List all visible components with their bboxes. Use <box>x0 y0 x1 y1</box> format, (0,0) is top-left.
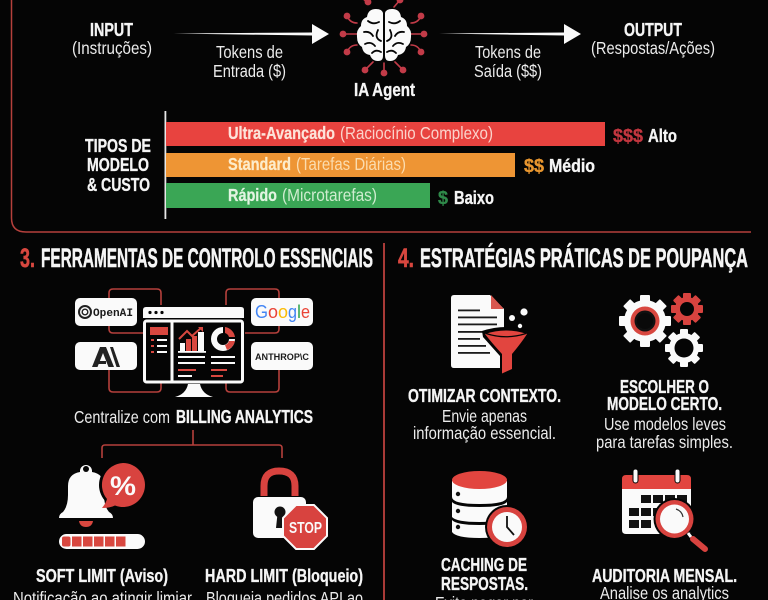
strategy 1 text: informação essencial. <box>413 423 556 443</box>
panel: control tools <box>13 243 373 600</box>
icon: analytics monitor <box>143 307 244 397</box>
bar chart: model cost tiers <box>164 111 677 219</box>
strategy 2 text: para tarefas simples. <box>596 432 733 452</box>
bar: standard: $$ <box>524 155 545 176</box>
strategy 1 text <box>408 385 561 443</box>
logo: Anthropic wordmark: ANTHROP\C <box>255 352 309 363</box>
connector lines: limits tree <box>102 430 282 458</box>
icon: hard limit padlock <box>253 471 327 549</box>
hard limit title: HARD LIMIT (Bloqueio) <box>205 565 363 586</box>
logo: Google: o <box>278 301 288 322</box>
output label <box>591 19 715 58</box>
bar: standard: Standard <box>228 154 291 174</box>
strategy 1 text: OTIMIZAR CONTEXTO. <box>408 385 561 406</box>
icon: hard limit padlock: STOP <box>289 520 322 537</box>
icon: gears <box>619 293 703 367</box>
connector lines: providers to dashboard <box>109 289 279 392</box>
bar: ultra advanced: $$$ <box>613 125 644 146</box>
input tokens label <box>213 42 286 81</box>
strategy 4 text <box>592 565 737 600</box>
bar: standard: Médio <box>549 155 595 176</box>
model types heading: TIPOS DE <box>85 135 151 156</box>
icon: database and clock <box>452 471 529 549</box>
heading: section 3: 3. <box>20 243 35 273</box>
divider between sections <box>383 243 385 600</box>
strategy 3 text: RESPOSTAS. <box>441 573 528 594</box>
icon: soft limit bell: % <box>110 471 136 501</box>
panel: savings strategies <box>398 242 748 600</box>
icon: brain with nodes <box>340 0 427 76</box>
bar: ultra advanced: Ultra-Avançado <box>228 123 335 143</box>
input tokens label: Tokens de <box>216 42 283 62</box>
bar: ultra advanced <box>166 122 677 146</box>
logo: Google: G <box>255 301 268 322</box>
model types heading: & CUSTO <box>87 174 150 195</box>
output tokens label: Tokens de <box>475 42 541 62</box>
bar: standard <box>166 153 595 177</box>
logo: Google <box>251 298 313 326</box>
panel: token flow and model costs frame <box>12 0 751 232</box>
input tokens label: Entrada ($) <box>213 61 286 81</box>
logo: Google: o <box>268 301 278 322</box>
strategy 1 text: Envie apenas <box>442 406 527 426</box>
caption: billing analytics: Centralize com <box>74 407 170 427</box>
heading: section 3 <box>20 243 373 273</box>
input label <box>72 19 152 58</box>
logo: Google: e <box>301 301 310 322</box>
bar: ultra advanced: Alto <box>648 125 677 146</box>
input label: INPUT <box>90 19 134 40</box>
logo: Google: l <box>297 301 301 322</box>
model types heading <box>85 135 151 195</box>
strategy 3 text <box>435 554 533 600</box>
model types heading: MODELO <box>87 154 149 175</box>
bar: fast <box>166 183 494 208</box>
strategy 2 text: Use modelos leves <box>604 414 726 434</box>
output label: OUTPUT <box>624 19 683 40</box>
icon: calendar and magnifier <box>622 469 705 549</box>
bar: fast: Rápido <box>228 185 277 205</box>
logo: Anthropic wordmark <box>251 342 313 370</box>
caption: billing analytics: BILLING ANALYTICS <box>176 406 313 427</box>
logo: Anthropic mark <box>75 342 137 370</box>
soft limit title: SOFT LIMIT (Aviso) <box>36 565 168 586</box>
icon: soft limit bell <box>59 461 147 527</box>
output tokens label <box>474 42 542 81</box>
agent label: IA Agent <box>354 79 415 100</box>
caption: billing analytics <box>74 406 313 427</box>
strategy 2 text: MODELO CERTO. <box>607 393 722 414</box>
strategy 2 text: ESCOLHER O <box>620 376 709 397</box>
bar: fast: (Microtarefas) <box>282 185 377 205</box>
arrow: agent to output <box>439 24 581 44</box>
heading: section 4: 4. <box>398 243 414 273</box>
logo: Google: g <box>288 301 297 322</box>
strategy 2 text <box>596 376 733 452</box>
logo: OpenAI <box>75 298 137 326</box>
strategy 3 text: CACHING DE <box>441 554 527 575</box>
output tokens label: Saída ($$) <box>474 61 542 81</box>
bar: ultra advanced: (Raciocínio Complexo) <box>340 123 493 143</box>
logo: OpenAI: OpenAI <box>93 308 133 320</box>
icon: usage progress bar <box>59 534 145 549</box>
output label: (Respostas/Ações) <box>591 38 715 58</box>
bar: fast: $ <box>438 187 449 208</box>
bar: standard: (Tarefas Diárias) <box>296 154 406 174</box>
input label: (Instruções) <box>72 38 152 58</box>
heading: section 3: FERRAMENTAS DE CONTROLO ESSENCIAIS <box>41 243 373 273</box>
icon: document and funnel <box>451 295 530 378</box>
arrow: input to agent <box>173 24 329 44</box>
bar: fast: Baixo <box>454 187 494 208</box>
